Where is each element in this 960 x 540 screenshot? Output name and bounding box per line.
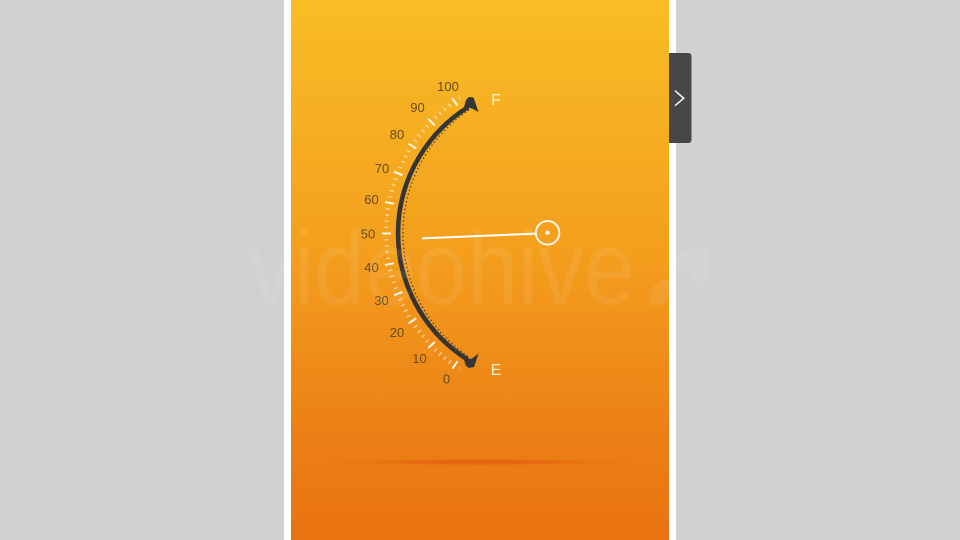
watermark leaf logo	[650, 249, 710, 306]
scale labels: 80	[390, 127, 404, 142]
watermark: videohive	[248, 210, 635, 327]
dark main arc	[398, 107, 468, 360]
scale labels: 90	[410, 100, 425, 115]
scale labels	[361, 79, 459, 386]
scale labels: 10	[412, 351, 427, 366]
minor tick marks	[386, 98, 460, 369]
F label: F	[491, 92, 501, 109]
top arrowhead	[464, 97, 478, 112]
E label: E	[491, 362, 501, 379]
scale labels: 40	[364, 260, 379, 275]
scale labels: 0	[443, 372, 450, 386]
dotted inner arc	[403, 110, 469, 357]
scale labels: 20	[390, 325, 404, 340]
bottom arrowhead	[464, 354, 478, 368]
floor shadow	[320, 458, 640, 466]
scale labels: 50	[361, 226, 375, 242]
needle	[422, 221, 559, 245]
scale labels: 30	[374, 293, 389, 308]
side tab with chevron	[669, 53, 692, 143]
scale labels: 100	[437, 79, 459, 94]
major tick marks	[382, 98, 458, 369]
scale labels: 70	[375, 161, 389, 176]
orange screen panel	[291, 0, 669, 540]
scale labels: 60	[364, 192, 379, 207]
gauge	[361, 79, 501, 386]
white device frame	[284, 0, 676, 540]
